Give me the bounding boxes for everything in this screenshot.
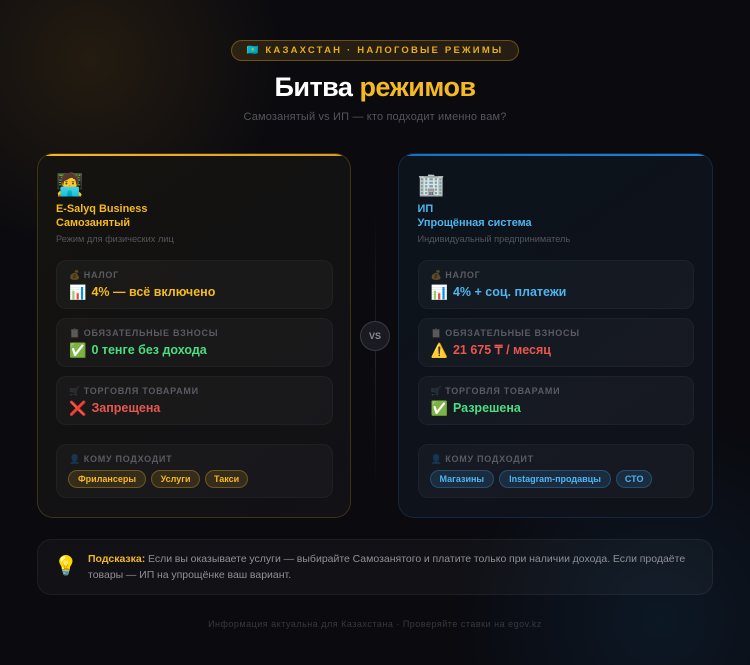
row: who it suits xyxy=(418,444,694,498)
subtitle: Самозанятый vs ИП — кто подходит именно вам? xyxy=(244,111,506,123)
row: who it suits: СТО xyxy=(625,474,643,484)
panel: self-employed xyxy=(37,153,351,518)
hint text xyxy=(88,552,685,580)
row: who it suits: Услуги xyxy=(161,474,191,484)
row: tax: 💰 НАЛОГ xyxy=(69,270,119,280)
row: mandatory contributions: 📋 ОБЯЗАТЕЛЬНЫЕ ВЗНОСЫ xyxy=(69,328,218,338)
row: who it suits: Instagram-продавцы xyxy=(509,474,601,484)
badge xyxy=(231,40,519,61)
row: goods trading xyxy=(56,376,333,425)
row: mandatory contributions: ✅ 0 тенге без дохода xyxy=(69,342,207,358)
divider line xyxy=(375,210,376,490)
entrepreneur heading: ИП xyxy=(418,203,433,215)
badge: 🇰🇿 КАЗАХСТАН · НАЛОГОВЫЕ РЕЖИМЫ xyxy=(247,45,503,56)
row: goods trading: 🛒 ТОРГОВЛЯ ТОВАРАМИ xyxy=(430,386,560,396)
row: mandatory contributions: ⚠️ 21 675 ₸ / месяц xyxy=(430,342,551,358)
row: tax xyxy=(418,260,694,309)
icon: office building: 🏢 xyxy=(418,172,445,197)
row: goods trading: 🛒 ТОРГОВЛЯ ТОВАРАМИ xyxy=(69,386,199,396)
self-employed heading: Самозанятый xyxy=(56,217,130,229)
panel: individual entrepreneur xyxy=(398,153,713,518)
icon: light bulb: 💡 xyxy=(54,556,78,577)
self-employed description: Режим для физических лиц xyxy=(56,234,174,244)
hint text: Подсказка: Если вы оказываете услуги — выбирайте Самозанятого и платите только при наличии дохода. Если продаёте xyxy=(88,552,685,564)
row: tax: 💰 НАЛОГ xyxy=(430,270,480,280)
row: mandatory contributions xyxy=(418,318,694,367)
row: who it suits: Такси xyxy=(214,474,239,484)
row: goods trading xyxy=(418,376,694,425)
footer note: Информация актуальна для Казахстана · Проверяйте ставки на egov.kz xyxy=(208,618,542,628)
row: mandatory contributions: 📋 ОБЯЗАТЕЛЬНЫЕ ВЗНОСЫ xyxy=(430,328,580,338)
row: who it suits: 👤 КОМУ ПОДХОДИТ xyxy=(69,454,172,464)
self-employed heading xyxy=(56,203,147,229)
entrepreneur heading: Упрощённая система xyxy=(418,217,532,229)
hint text: товары — ИП на упрощёнке ваш вариант. xyxy=(88,568,291,580)
row: goods trading: ❌ Запрещена xyxy=(69,400,160,416)
title: Битва режимов xyxy=(274,72,476,102)
row: who it suits: Фрилансеры xyxy=(78,474,136,484)
entrepreneur description: Индивидуальный предприниматель xyxy=(418,234,570,244)
row: who it suits: Магазины xyxy=(440,474,484,484)
panel: hint xyxy=(37,539,713,595)
icon: technologist: 🧑‍💻 xyxy=(56,172,83,197)
row: tax xyxy=(56,260,333,309)
row: mandatory contributions xyxy=(56,318,333,367)
row: tax: 📊 4% + соц. платежи xyxy=(430,284,566,300)
row: who it suits: 👤 КОМУ ПОДХОДИТ xyxy=(430,454,534,464)
vs badge xyxy=(360,321,390,351)
self-employed heading: E-Salyq Business xyxy=(56,203,147,215)
row: tax: 📊 4% — всё включено xyxy=(69,284,215,300)
entrepreneur heading xyxy=(418,203,532,229)
row: goods trading: ✅ Разрешена xyxy=(430,400,521,416)
vs badge: VS xyxy=(369,331,381,341)
row: who it suits xyxy=(56,444,333,498)
